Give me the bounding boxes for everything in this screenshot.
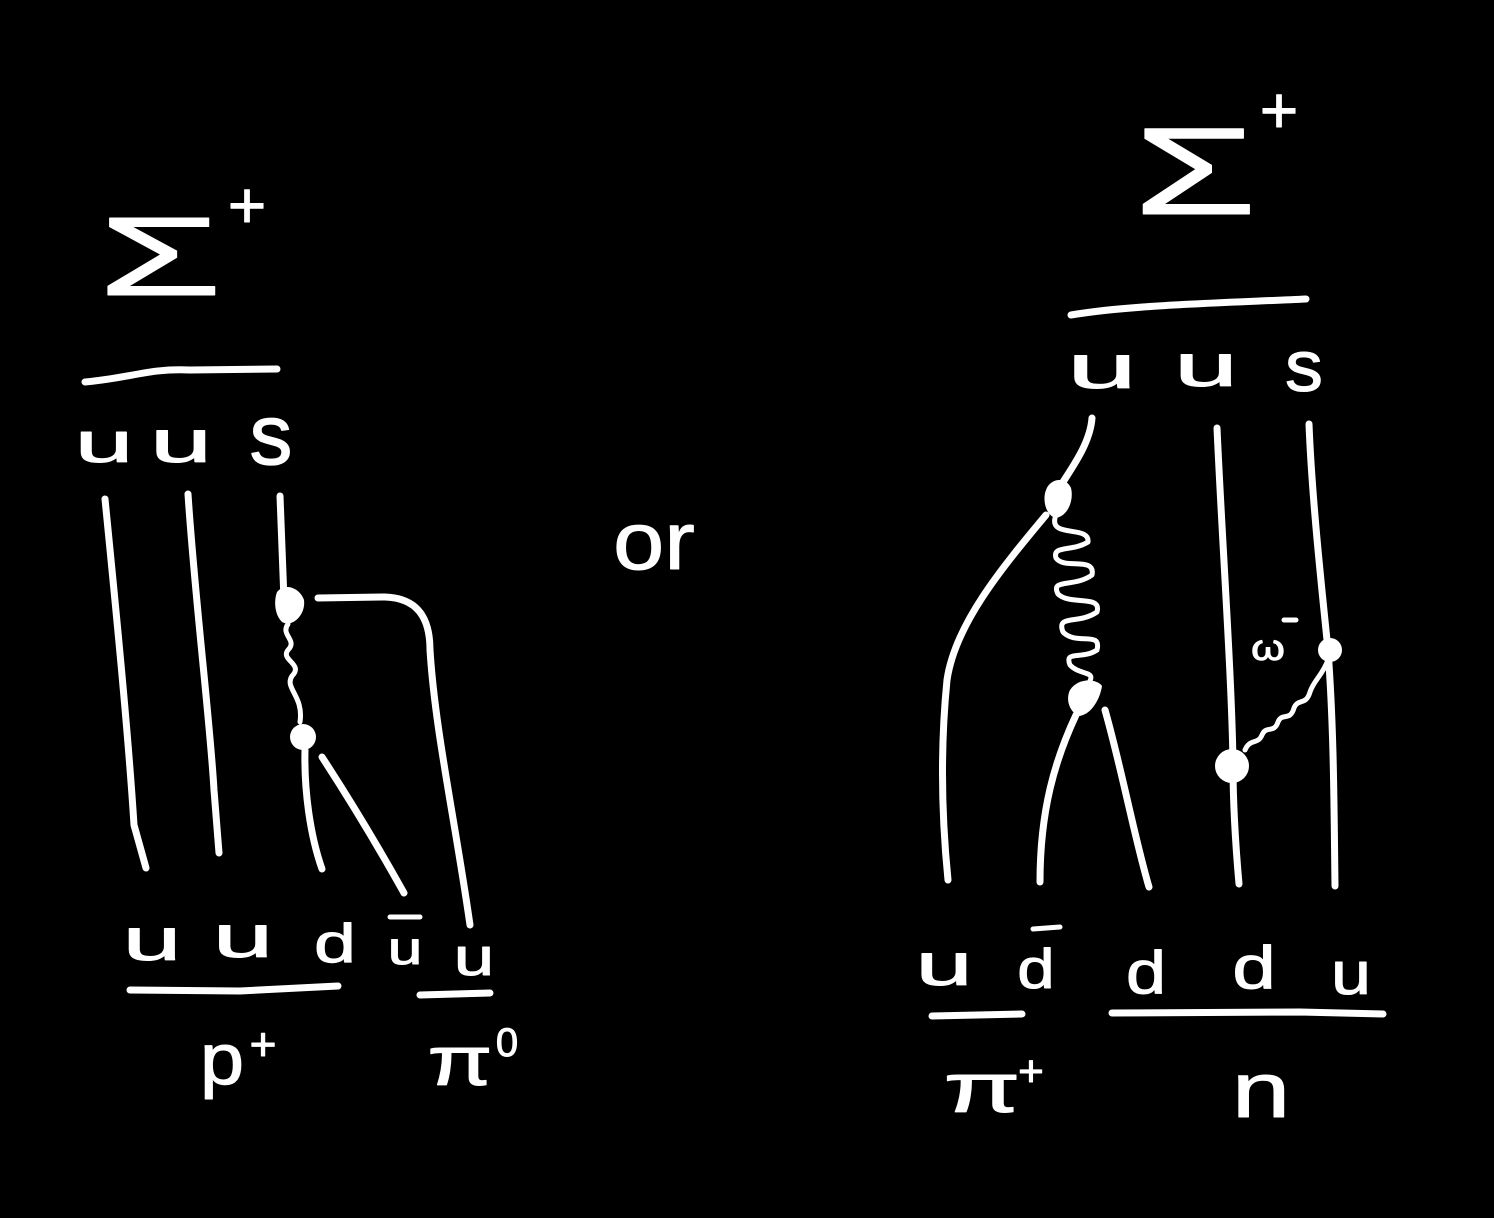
- initial quarks: u u s (left): s: [250, 387, 292, 483]
- heading: sigma plus (right): +: [1260, 73, 1298, 147]
- bar over initial quarks (right): [1071, 299, 1306, 315]
- initial quarks: u u s (right): u: [1174, 333, 1238, 399]
- final quarks: u dbar d d u (right): d: [1126, 940, 1166, 1007]
- final quarks: u dbar d d u (right): d: [1232, 934, 1276, 1001]
- bar under neutron quarks: [1112, 1012, 1383, 1014]
- final quarks: u dbar d d u (right): u: [916, 931, 972, 998]
- final quarks: u dbar d d u (right): [916, 927, 1371, 1008]
- strange quark line with weak boson and vertices: [275, 496, 470, 925]
- spectator up quark line with weak boson vertex: [1215, 428, 1249, 884]
- W minus boson wavy line: [1245, 660, 1328, 750]
- final quarks: u dbar d d u (right): d: [1017, 938, 1055, 1001]
- heading: sigma plus (right): Σ: [1133, 103, 1257, 241]
- heading: sigma plus (left): [98, 168, 266, 319]
- final quarks: u u d ubar u (left): u: [454, 927, 494, 987]
- label: proton: p: [200, 1019, 244, 1100]
- final quarks: u u d ubar u (left): u: [213, 904, 273, 970]
- connector word: or: or: [613, 496, 695, 587]
- final quarks: u u d ubar u (left): u: [123, 908, 181, 973]
- up quark line with gluon: [943, 418, 1149, 887]
- heading: sigma plus (left): Σ: [98, 193, 222, 319]
- initial quarks: u u s (right): [1067, 326, 1323, 407]
- spectator quark lines (left): [105, 494, 219, 868]
- final quarks: u u d ubar u (left): u: [388, 923, 422, 974]
- label: neutron: n: [1232, 1046, 1290, 1134]
- heading: sigma plus (left): +: [228, 168, 266, 242]
- initial quarks: u u s (right): s: [1285, 326, 1323, 407]
- label: proton: +: [250, 1018, 276, 1070]
- left diagram: sigma plus to proton and neutral pion: [75, 168, 518, 1100]
- initial quarks: u u s (right): u: [1067, 333, 1137, 402]
- label: W minus: [1251, 620, 1296, 668]
- final quarks: u u d ubar u (left): [123, 904, 494, 987]
- bar over initial quarks (left): [85, 369, 277, 382]
- right diagram: sigma plus to positive pion and neutron: [916, 73, 1383, 1134]
- initial quarks: u u s (left): u: [75, 410, 133, 474]
- label: W minus: ω: [1251, 628, 1285, 668]
- initial quarks: u u s (left): u: [150, 409, 212, 475]
- heading: sigma plus (right): [1133, 73, 1298, 241]
- label: positive pion: π: [943, 1048, 1021, 1127]
- bar under pion quarks: [420, 993, 490, 995]
- label: neutral pion: 0: [496, 1021, 518, 1065]
- label: neutral pion: π: [427, 1022, 493, 1100]
- label: positive pion: +: [1018, 1047, 1044, 1096]
- strange quark line: [1309, 424, 1342, 886]
- label: proton: [200, 1018, 276, 1100]
- bar under pion quarks (right): [932, 1014, 1022, 1016]
- bar under proton quarks: [130, 986, 338, 991]
- initial quarks: u u s (left): [75, 387, 292, 483]
- final quarks: u u d ubar u (left): d: [314, 912, 356, 974]
- final quarks: u dbar d d u (right): u: [1331, 941, 1371, 1008]
